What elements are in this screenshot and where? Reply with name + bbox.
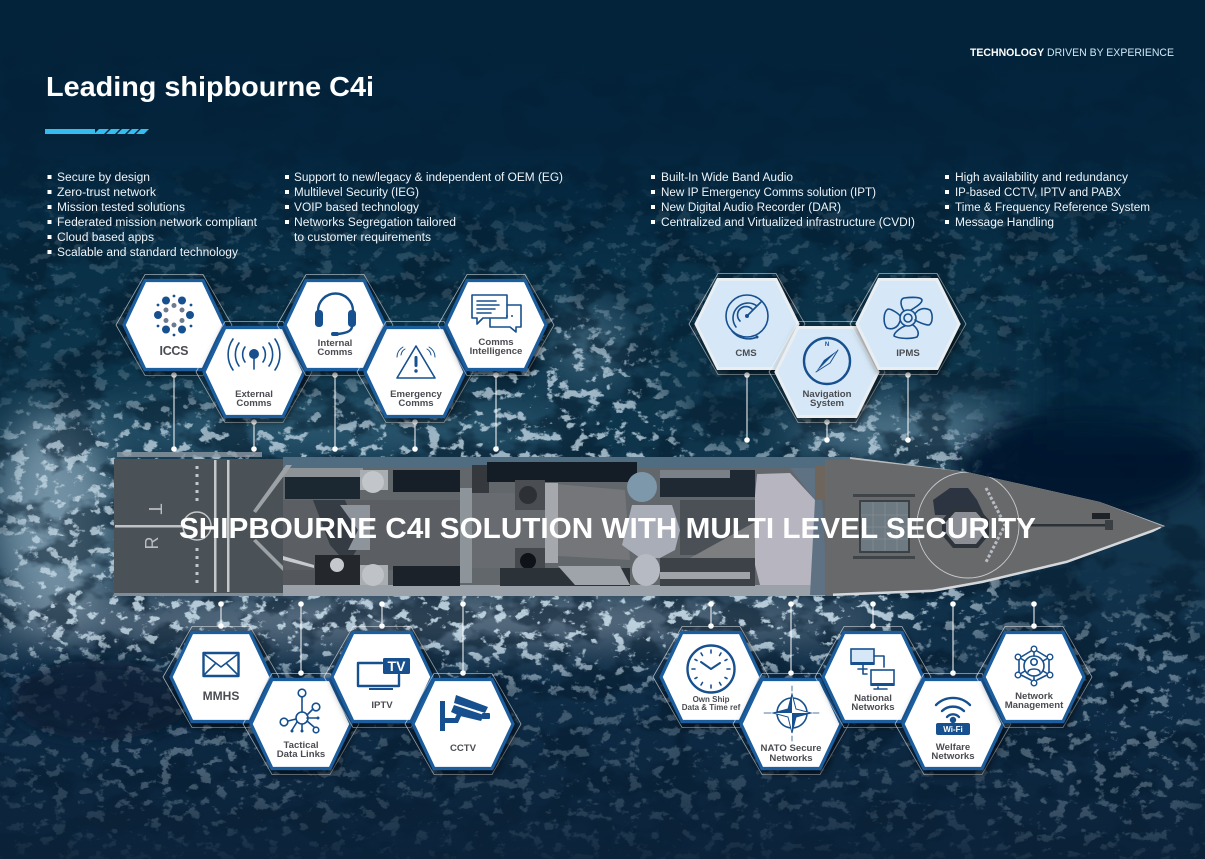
hex: IPTV: [324, 626, 440, 728]
hex: Own Ship Data & Time ref: Own Ship: [693, 695, 730, 704]
hex: CMS: CMS: [735, 348, 757, 359]
hex: Emergency Comms: Comms: [398, 398, 434, 409]
bullet list 4: High availability and redundancy: [955, 172, 1128, 184]
bullet list 1: Secure by design: [57, 172, 150, 184]
brand tagline: TECHNOLOGY DRIVEN BY EXPERIENCE: [970, 47, 1174, 59]
bullet list 1: Cloud based apps: [57, 232, 154, 244]
hex: Emergency Comms: [357, 322, 473, 422]
title: Leading shipbourne C4i: [46, 71, 374, 102]
hex: Own Ship Data & Time ref: Data & Time ref: [682, 703, 741, 712]
ship top view: T: [145, 504, 165, 514]
bullet list 4: Time & Frequency Reference System: [955, 202, 1150, 214]
background: ocean: [0, 186, 1205, 859]
bullet list 3: [651, 172, 915, 229]
hex: IPTV: TV: [388, 658, 406, 674]
hex: NATO Secure Networks: Networks: [769, 753, 813, 764]
bullet list 1: Zero-trust network: [57, 187, 156, 199]
hex: Comms Intelligence: [438, 274, 554, 376]
bullet list 2: VOIP based technology: [294, 202, 419, 214]
bullet list 1: Federated mission network compliant: [57, 217, 258, 229]
hex: IPMS: [850, 274, 966, 374]
hex: CCTV: [405, 674, 521, 774]
hex: Internal Comms: [277, 274, 393, 376]
bullet list 1: Mission tested solutions: [57, 202, 185, 214]
hex: Own Ship Data & Time ref: [653, 626, 769, 728]
hex: Internal Comms: Comms: [317, 347, 353, 358]
bullet list 2: Support to new/legacy & independent of OEM (EG): [294, 172, 563, 184]
hex: Tactical Data Links: [243, 674, 359, 774]
bullet list 3: Built-In Wide Band Audio: [661, 172, 793, 184]
hex: NATO Secure Networks: [733, 674, 849, 774]
hex: Welfare Networks: [895, 674, 1011, 774]
hex: NATO Secure Networks: NATO Secure: [761, 743, 821, 754]
bullet list 2: Networks Segregation tailored: [294, 217, 456, 229]
hex: ICCS: ICCS: [160, 344, 188, 358]
hex: External Comms: External: [235, 389, 273, 400]
hex: External Comms: [196, 322, 312, 422]
accent bar: [45, 129, 149, 134]
hex: Welfare Networks: Wi-Fi: [943, 725, 963, 734]
hex: Navigation System: System: [810, 398, 844, 409]
hex: Internal Comms: Internal: [318, 338, 352, 349]
bullet list 4: Message Handling: [955, 217, 1054, 229]
central heading: SHIPBOURNE C4I SOLUTION WITH MULTI LEVEL SECURITY: [179, 513, 1036, 545]
hex: Comms Intelligence: Intelligence: [470, 346, 522, 357]
bullet list 4: IP-based CCTV, IPTV and PABX: [955, 187, 1121, 199]
hex: Navigation System: N: [825, 342, 829, 348]
hex: Navigation System: [769, 322, 885, 422]
bullet list 2: [285, 172, 563, 244]
hex: Tactical Data Links: Tactical: [283, 740, 319, 751]
hex: Network Management: [976, 626, 1092, 728]
hex: Navigation System: Navigation: [802, 389, 852, 400]
hex: National Networks: Networks: [851, 702, 895, 713]
hex: External Comms: Comms: [236, 398, 272, 409]
hex: CCTV: CCTV: [450, 743, 477, 754]
hex: Network Management: Network: [1015, 691, 1054, 702]
hex: Comms Intelligence: Comms: [478, 337, 514, 348]
ship top view: [114, 452, 1174, 597]
hex: Emergency Comms: Emergency: [390, 389, 443, 400]
hex: Welfare Networks: Welfare: [936, 742, 970, 753]
hex: National Networks: National: [854, 693, 892, 704]
bullet list 3: New IP Emergency Comms solution (IPT): [661, 187, 876, 199]
bullet list 2: to customer requirements: [294, 232, 431, 244]
hex: Network Management: Management: [1005, 700, 1064, 711]
hex: CMS: [689, 274, 805, 374]
hex: MMHS: MMHS: [203, 689, 239, 703]
bullet list 1: [48, 172, 258, 259]
hex: Tactical Data Links: Data Links: [277, 749, 325, 760]
hex: MMHS: [163, 626, 279, 728]
hex: National Networks: [815, 626, 931, 728]
hex: IPTV: IPTV: [371, 700, 393, 711]
bullet list 3: New Digital Audio Recorder (DAR): [661, 202, 841, 214]
hex: Welfare Networks: Networks: [931, 751, 975, 762]
bullet list 2: Multilevel Security (IEG): [294, 187, 419, 199]
connector lines: [171, 372, 1037, 676]
hex: ICCS: [116, 274, 232, 376]
ship top view: R: [142, 536, 162, 550]
bullet list 1: Scalable and standard technology: [57, 247, 238, 259]
bullet list 4: [945, 172, 1150, 229]
hex: IPMS: IPMS: [896, 348, 920, 359]
bullet list 3: Centralized and Virtualized infrastructure (CVDI): [661, 217, 915, 229]
